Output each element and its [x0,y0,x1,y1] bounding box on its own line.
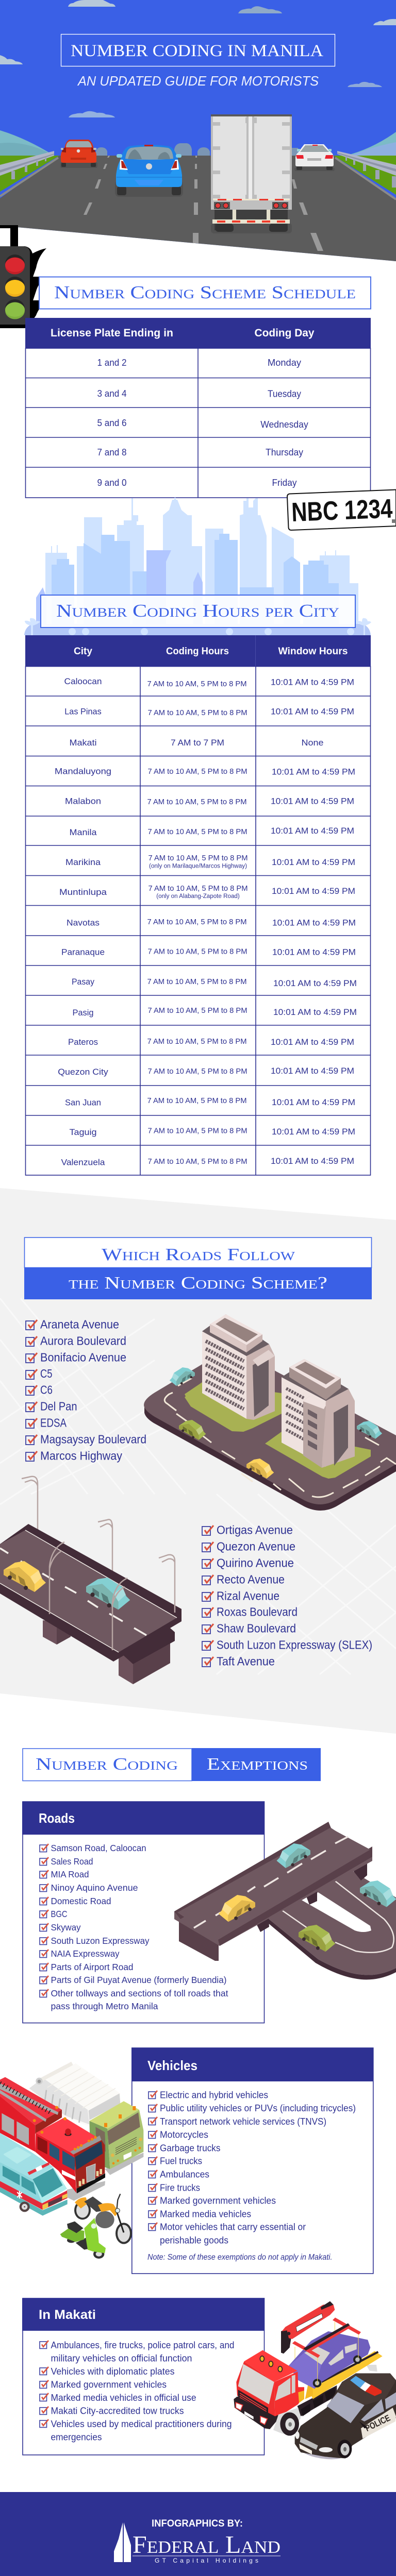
car: yellow taxi [4,1561,46,1592]
illustration: emergency and service vehicles [0,2063,143,2259]
row: Navotas: 10:01 AM to 4:59 PM [272,918,356,927]
blue car [115,145,183,197]
row: Malabon [65,796,354,806]
item: Sales Road: Sales Road [51,1856,93,1867]
row: Pasig: 7 AM to 10 AM, 5 PM to 8 PM [147,1007,248,1015]
item: C6 [26,1383,53,1396]
row: 7 and 8: 7 and 8 [97,447,127,457]
row: Valenzuela [61,1156,354,1167]
item: Shaw Boulevard: Shaw Boulevard [217,1622,296,1635]
item: Motor vehicles that carry essential: perishable goods [160,2235,228,2245]
row: Manila: 7 AM to 10 AM, 5 PM to 8 PM [147,828,248,836]
row: Muntinlupa: Muntinlupa [59,887,107,897]
illustration: tow truck and police car [234,2301,396,2459]
item: Electric and hybrid vehicles: Electric and hybrid vehicles [160,2090,268,2100]
row: Las Pinas [64,707,354,717]
garbage truck [29,2063,143,2175]
item: C6: C6 [40,1383,53,1396]
table header [25,318,371,348]
row: Navotas: 7 AM to 10 AM, 5 PM to 8 PM [147,918,246,926]
road [0,156,396,261]
row: Navotas [67,918,356,927]
row: Taguig [69,1127,355,1137]
skyline illustration [24,498,371,635]
item: Vehicles used by medical practitioners [40,2418,232,2442]
row: 9 and 0 [97,477,297,488]
row: Mandaluyong: Mandaluyong [55,767,111,776]
heading: which roads follow the number coding scheme [24,1238,372,1299]
item: Del Pan [26,1399,77,1413]
row: Muntinlupa: 7 AM to 10 AM, 5 PM to 8 PM [148,885,248,893]
row: Quezon City: Quezon City [58,1067,108,1077]
row: Paranaque [61,947,356,957]
car: yellow [246,1459,274,1479]
building one [202,1314,275,1420]
police car [295,2374,396,2459]
item: South Luzon Expressway: South Luzon Expressway [51,1936,150,1946]
row: Quezon City: 10:01 AM to 4:59 PM [271,1066,354,1076]
row: 3 and 4: Tuesday [268,388,302,399]
table: coding hours per city [25,635,371,1175]
row: Marikina: 10:01 AM to 4:59 PM [272,857,355,867]
item: BGC: BGC [51,1909,67,1919]
item: Marked media vehicles in official use: Marked media vehicles in official use [51,2392,196,2403]
footer heading: INFOGRAPHICS BY: [152,2518,243,2529]
checklist: roads right [202,1523,372,1668]
row: Makati: 7 AM to 7 PM [171,738,224,748]
title box: NUMBER CODING IN MANILA [71,42,323,60]
row: Pasig: 10:01 AM to 4:59 PM [273,1007,357,1017]
red car [60,140,97,168]
item: Taft Avenue: Taft Avenue [217,1655,275,1668]
logo: Federal Land: GT Capital Holdings [155,2557,258,2564]
item: EDSA: EDSA [40,1416,67,1429]
item: Vehicles with diplomatic plates: Vehicles with diplomatic plates [51,2366,174,2377]
car: teal right [357,1421,382,1439]
table header: City [74,646,92,657]
checklist: roads left [26,1318,146,1462]
row: Malabon: Malabon [65,796,101,806]
item: Aurora Boulevard: Aurora Boulevard [40,1334,126,1348]
row: Mandaluyong: 7 AM to 10 AM, 5 PM to 8 PM [147,768,248,776]
row: Caloocan: Caloocan [64,676,102,686]
road edge lines [0,158,396,199]
car: yellow [219,1895,255,1922]
item: EDSA [26,1416,67,1429]
row: Pasig [72,1007,357,1018]
row: 5 and 6 [97,417,308,430]
row: Pateros: 7 AM to 10 AM, 5 PM to 8 PM [147,1038,246,1046]
panel: vehicles [131,2048,373,2274]
grass [0,156,396,195]
item: Makati City-accredited tow trucks: Makati City-accredited tow trucks [51,2405,184,2416]
row: Las Pinas: 10:01 AM to 4:59 PM [271,707,354,716]
row: Valenzuela: Valenzuela [61,1157,105,1167]
item: Ninoy Aquino Avenue: Ninoy Aquino Avenue [51,1883,138,1893]
item: Rizal Avenue: Rizal Avenue [217,1589,279,1602]
logo: Federal Land [114,2522,280,2564]
row: Manila: 10:01 AM to 4:59 PM [271,826,354,836]
sky background [0,0,396,261]
row: Marikina: (only on Marilaque/Marcos Highway) [149,863,247,870]
panel header: In Makati: In Makati [39,2308,96,2322]
item: Other tollways: Other tollways and sections of toll roads that [51,1988,228,1998]
item: C5: C5 [40,1367,53,1380]
row: Las Pinas: Las Pinas [64,707,102,716]
note: Note: Some of these exemptions do not apply in Makati. [147,2253,332,2262]
lamp posts front [50,1542,175,1650]
item: Samson Road, Caloocan: Samson Road, Caloocan [51,1843,146,1853]
section: which roads background [0,1188,396,1734]
row: 7 and 8: Thursday [266,447,304,457]
panel header: Vehicles: Vehicles [147,2058,197,2073]
table: license plate schedule [25,318,371,498]
item: Marcos Highway: Marcos Highway [40,1449,122,1462]
row: Pasay [72,977,357,988]
row: Muntinlupa: 10:01 AM to 4:59 PM [272,886,355,896]
item: Marked media vehicles: Marked media vehicles [160,2209,251,2219]
row: Muntinlupa: (only on Alabang-Zapote Road) [156,893,240,900]
row: San Juan: 7 AM to 10 AM, 5 PM to 8 PM [147,1097,246,1105]
row: Pasay: 10:01 AM to 4:59 PM [273,978,357,988]
item: Ambulances, fire trucks [40,2340,234,2364]
row: Caloocan: 10:01 AM to 4:59 PM [271,677,354,687]
row: Taguig: 10:01 AM to 4:59 PM [272,1127,355,1137]
row: Quezon City: 7 AM to 10 AM, 5 PM to 8 PM [147,1067,248,1076]
item: Recto Avenue: Recto Avenue [217,1572,285,1586]
item: Parts of Gil Puyat Avenue: Parts of Gil Puyat Avenue (formerly Buendia) [51,1975,227,1985]
row: San Juan [65,1097,355,1108]
row: Pateros: Pateros [68,1037,98,1047]
item: Transport network vehicle services: Transport network vehicle services (TNVS) [160,2116,326,2127]
item: Ambulances, fire trucks: military vehicles on official function [51,2352,192,2364]
row: Pasay: Pasay [72,977,94,987]
item: Parts of Airport Road: Parts of Airport Road [51,1962,133,1972]
car: teal rear [170,1367,195,1386]
row: Makati: Makati [69,738,97,748]
table header: Coding Day [255,327,315,339]
panel header: Vehicles [131,2048,373,2081]
row: 3 and 4: 3 and 4 [97,388,127,399]
row: Paranaque: 10:01 AM to 4:59 PM [272,947,356,957]
panel header: In Makati [22,2298,265,2331]
row: 3 and 4 [97,388,302,399]
item: Roxas Boulevard: Roxas Boulevard [217,1605,298,1619]
row: Pateros: 10:01 AM to 4:59 PM [271,1037,354,1047]
item: Fire trucks: Fire trucks [160,2182,200,2193]
clouds [0,0,396,117]
item: Ambulances: Ambulances [160,2169,209,2179]
row: 5 and 6: Wednesday [260,419,308,430]
row: 5 and 6: 5 and 6 [97,417,127,428]
heading: number coding exemptions: Exemptions [207,1755,308,1774]
row: Las Pinas: 7 AM to 10 AM, 5 PM to 8 PM [147,709,248,717]
item: Other tollways [40,1988,228,2011]
skyline base and palms [24,624,371,635]
item: Motor vehicles that carry essential: Motor vehicles that carry essential or [160,2222,306,2232]
item: Del Pan: Del Pan [40,1399,77,1413]
row: Valenzuela: 10:01 AM to 4:59 PM [271,1156,354,1166]
heading: number coding hours per city: Number Coding Hours per City [56,601,339,621]
illustration: interchange [174,1822,396,1979]
ambulance [0,2133,68,2216]
building two [282,1359,355,1468]
row: 1 and 2 [97,357,302,368]
motorcycle [74,2194,132,2244]
item: NAIA Expressway: NAIA Expressway [51,1948,120,1959]
row: Caloocan: 7 AM to 10 AM, 5 PM to 8 PM [147,680,246,688]
item: MIA Road: MIA Road [51,1869,89,1879]
heading: number coding hours per city [41,595,355,628]
table header: License Plate Ending in [51,327,173,339]
panel: in Makati [22,2298,265,2455]
heading: number coding scheme schedule [39,277,371,309]
item: Marked government vehicles: Marked government vehicles [160,2196,276,2206]
row: Pasig: Pasig [72,1008,94,1018]
subtitle: AN UPDATED GUIDE FOR MOTORISTS [77,73,319,89]
row: Malabon: 10:01 AM to 4:59 PM [271,796,354,806]
item: Vehicles used by medical practitioners: Vehicles used by medical practitioners during [51,2418,232,2429]
row: Marikina [65,854,355,870]
white car [294,144,335,171]
panel: roads [22,1802,265,2023]
heading: which roads follow the number coding scheme: the Number Coding Scheme? [69,1274,327,1293]
lane markings [84,156,323,251]
heading: which roads follow the number coding scheme: Which Roads Follow [102,1245,295,1264]
guardrails [0,151,396,188]
truck [211,114,292,233]
row: 1 and 2: Monday [268,357,302,368]
car: teal one [276,1843,310,1868]
row: Manila: Manila [69,827,97,837]
item: Marked government vehicles: Marked government vehicles [51,2379,167,2389]
row: Mandaluyong: 10:01 AM to 4:59 PM [272,767,355,777]
heading: number coding scheme schedule: Number Coding Scheme Schedule [54,282,356,302]
item: Garbage trucks: Garbage trucks [160,2143,221,2154]
footer [0,2492,396,2576]
row: Malabon: 7 AM to 10 AM, 5 PM to 8 PM [147,798,246,806]
section: hero [0,0,396,261]
row: Pateros [68,1037,354,1047]
heading: number coding exemptions [23,1748,321,1781]
row: Paranaque: Paranaque [61,947,105,957]
icon: traffic light [0,225,46,328]
row: Taguig: Taguig [69,1127,97,1137]
item: Fuel trucks: Fuel trucks [160,2156,202,2166]
item: South Luzon Expressway (SLEX): South Luzon Expressway (SLEX) [217,1638,372,1652]
item: Motor vehicles that carry essential [148,2222,306,2245]
row: 7 and 8 [97,447,304,457]
car: green [179,1420,206,1440]
item: Quezon Avenue: Quezon Avenue [217,1539,295,1553]
row: 9 and 0: Friday [272,477,297,488]
row: Valenzuela: 7 AM to 10 AM, 5 PM to 8 PM [147,1158,248,1166]
item: Ortigas Avenue: Ortigas Avenue [217,1523,293,1536]
row: Makati: None [301,738,324,748]
row: Navotas: Navotas [67,918,100,927]
item: Motorcycles: Motorcycles [160,2130,208,2140]
row: Marikina: Marikina [65,857,101,867]
heading: number coding exemptions: Number Coding [36,1755,178,1774]
row: Marikina: 7 AM to 10 AM, 5 PM to 8 PM [148,854,248,862]
row: Muntinlupa [59,885,355,900]
item: Magsaysay Boulevard: Magsaysay Boulevard [40,1432,146,1446]
distant cars [96,143,298,156]
row: Pasay: 7 AM to 10 AM, 5 PM to 8 PM [147,978,246,986]
panel header: Roads: Roads [39,1810,75,1826]
row: Mandaluyong [55,767,355,777]
item: Quirino Avenue: Quirino Avenue [217,1556,294,1569]
tow truck [234,2301,383,2436]
item: BGC [40,1909,67,1919]
row: 1 and 2: 1 and 2 [97,357,127,368]
hills [0,130,396,156]
item: C5 [26,1367,53,1380]
row: Paranaque: 7 AM to 10 AM, 5 PM to 8 PM [147,948,248,956]
illustration: isometric city block [144,1314,396,1511]
fire truck [0,2077,105,2201]
item: Bonifacio Avenue: Bonifacio Avenue [40,1351,126,1364]
car: teal sedan [86,1578,130,1609]
row: 9 and 0: 9 and 0 [97,477,127,488]
item: Public utility vehicles: Public utility vehicles or PUVs (including tricycles) [160,2103,356,2113]
item: Vehicles used by medical practitioners: emergencies [51,2432,102,2442]
logo: Federal Land: Federal Land [133,2531,280,2558]
car: teal two [360,1880,396,1907]
table header [25,635,371,667]
row: Manila [69,826,354,837]
item: Domestic Road: Domestic Road [51,1896,111,1906]
row: Caloocan [64,676,354,688]
item: Ambulances, fire trucks: Ambulances, fire trucks, police patrol cars, and [51,2340,234,2350]
item: Skyway: Skyway [51,1922,81,1933]
row: San Juan: 10:01 AM to 4:59 PM [272,1097,355,1107]
table header: Coding Hours [166,646,229,657]
panel header: Roads [22,1802,265,1835]
row: Quezon City [58,1066,354,1077]
row: Taguig: 7 AM to 10 AM, 5 PM to 8 PM [147,1127,248,1136]
title box [61,34,335,66]
item: Other tollways: pass through Metro Manila [51,2001,158,2011]
row: Makati [69,738,324,748]
row: San Juan: San Juan [65,1097,101,1108]
item: Araneta Avenue: Araneta Avenue [40,1318,119,1331]
lamp posts rear [22,1477,112,1577]
scooter [60,2218,106,2259]
car: green [299,1925,335,1952]
table header: Window Hours [278,646,348,657]
illustration: overpass [0,1477,182,1684]
